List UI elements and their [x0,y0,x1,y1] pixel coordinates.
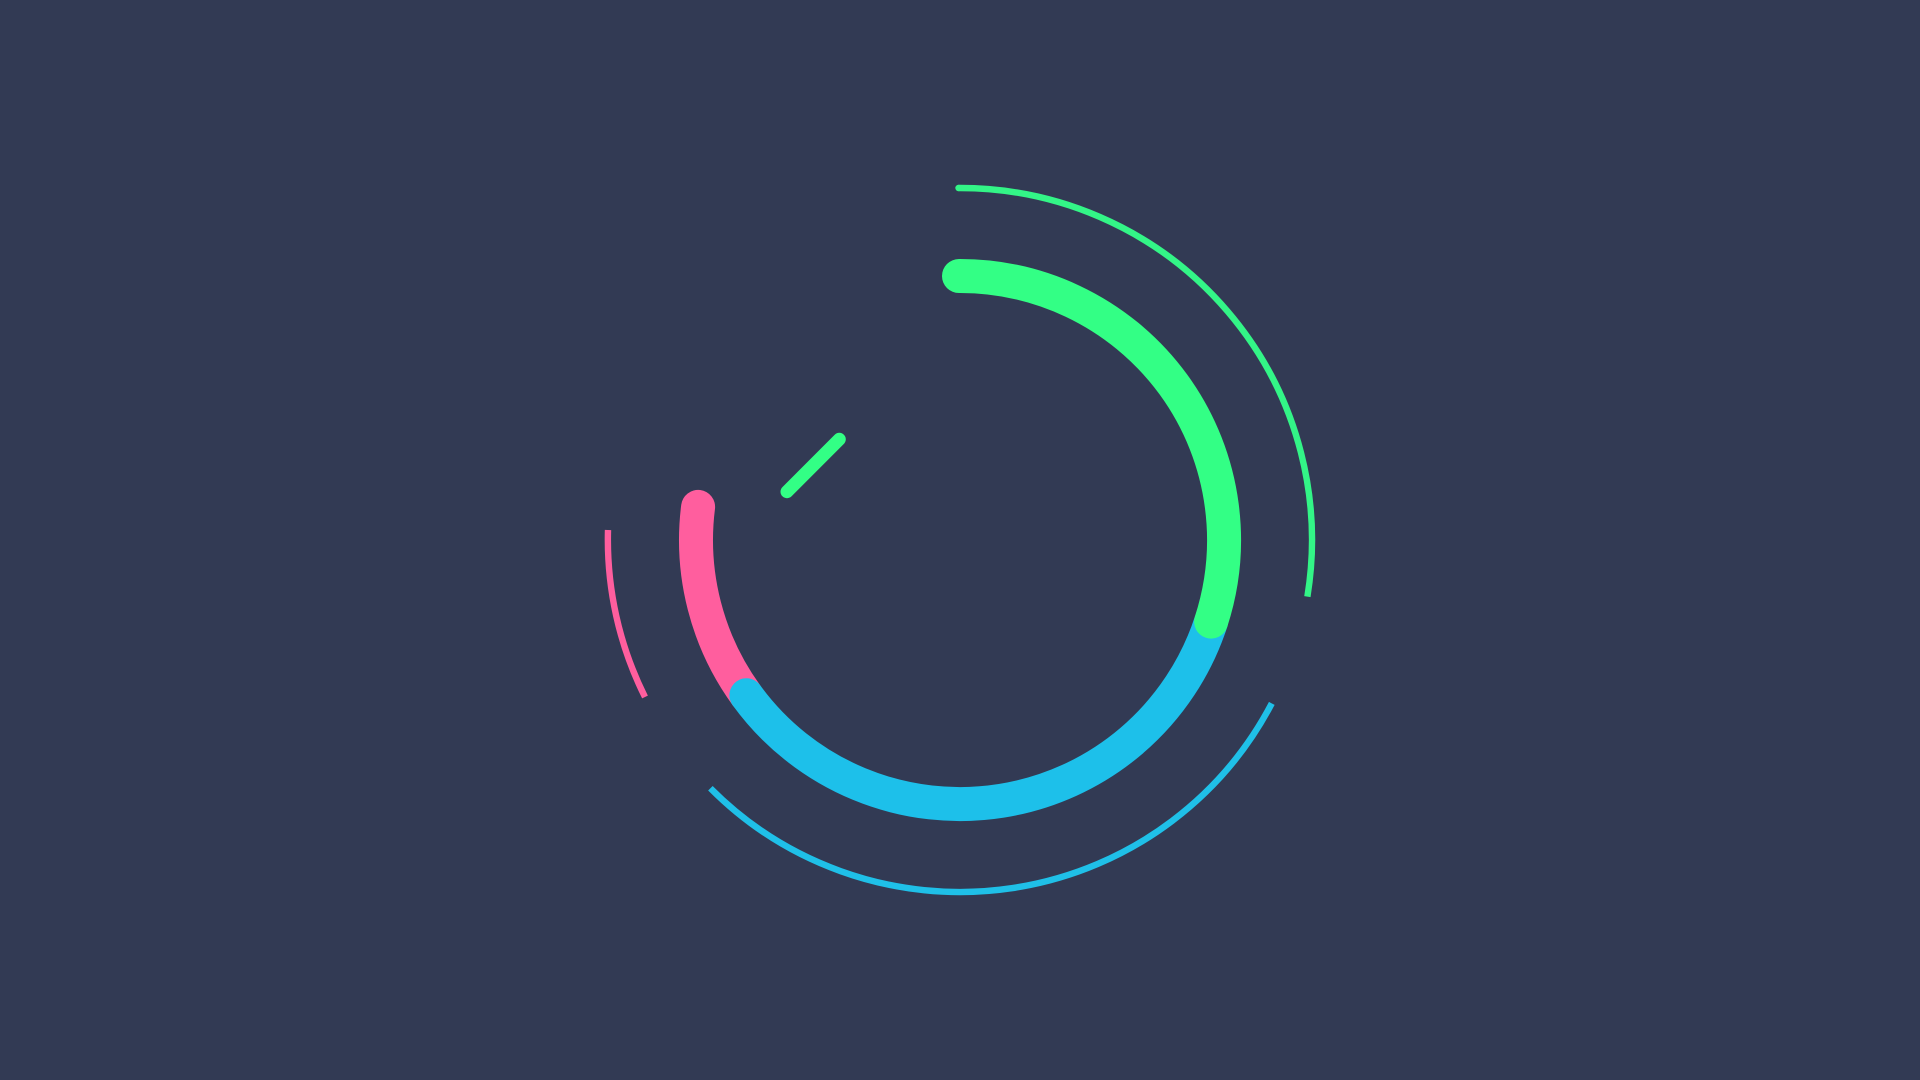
short diagonal green dash [787,439,839,492]
thick ring segment: cyan [746,622,1211,804]
thick ring segment: pink [696,507,746,695]
thin outer arc: pink [608,530,645,697]
thin outer arc: cyan [710,703,1272,892]
cap of thin green arc [955,185,962,191]
thick ring segment: green [959,276,1224,622]
thin outer arc: green [958,188,1312,597]
